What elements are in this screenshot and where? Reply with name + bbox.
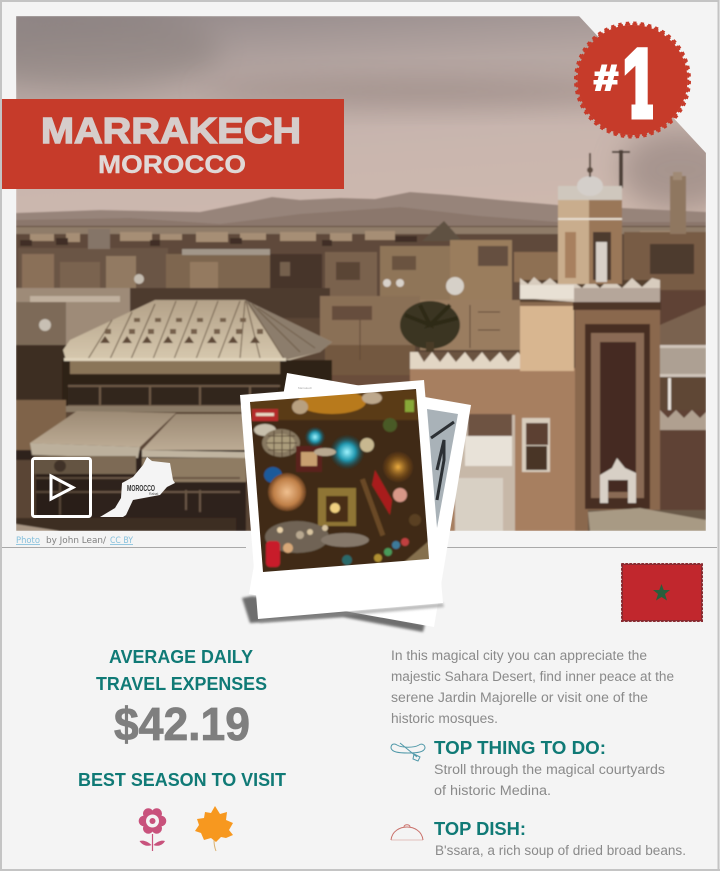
lantern market photo [250, 389, 429, 572]
polaroid stack [240, 373, 471, 632]
description paragraph: historic mosques. [391, 711, 498, 726]
rank number foot trim [612, 102, 663, 122]
map of Morocco [100, 457, 175, 517]
map label: MOROCCO [127, 484, 155, 493]
expense amount: $42.19 [114, 698, 250, 750]
top thing text [434, 762, 665, 798]
icon: spring flower [139, 808, 166, 851]
photo credit [16, 536, 134, 546]
polaroid shadow [242, 596, 425, 632]
hero photo of Marrakech skyline [0, 10, 720, 531]
city name: MARRAKECH [41, 110, 301, 151]
photo credit: by John Lean/ [46, 536, 106, 546]
description paragraph: serene Jardin Majorelle or visit one of the [391, 690, 648, 705]
top dish text: B'ssara, a rich soup of dried broad beans. [435, 843, 686, 858]
tent [62, 360, 332, 410]
expenses heading [96, 647, 267, 694]
rank number: 1 [622, 29, 658, 138]
title banner [2, 99, 344, 189]
top thing text: Stroll through the magical courtyards [434, 762, 665, 777]
video play button [32, 458, 90, 516]
front polaroid [240, 380, 444, 623]
map sublabel: Rabat [149, 492, 158, 496]
section divider line [2, 546, 717, 548]
back polaroid [249, 373, 471, 627]
description paragraph: In this magical city you can appreciate the [391, 648, 647, 663]
top dish heading: TOP DISH: [434, 818, 526, 839]
rank hash: # [594, 59, 618, 98]
description paragraph: majestic Sahara Desert, find inner peace at the [391, 669, 674, 684]
top thing heading: TOP THING TO DO: [434, 737, 606, 758]
back polaroid: Marrakech [298, 386, 313, 390]
panel: top dish [434, 818, 686, 858]
lower market [16, 399, 67, 451]
icon: canoe [391, 743, 425, 761]
panel: top thing to do [434, 737, 665, 798]
icon: dish cloche [391, 825, 423, 840]
expenses heading: TRAVEL EXPENSES [96, 674, 267, 694]
photo credit: Photo [16, 536, 40, 546]
right walls and tower [660, 290, 706, 293]
flag of Morocco [622, 564, 702, 621]
panel: best season [78, 769, 287, 851]
icon: autumn leaf [195, 806, 233, 851]
photo credit: CC BY [110, 536, 134, 546]
description paragraph [391, 648, 674, 726]
season heading: BEST SEASON TO VISIT [78, 769, 287, 790]
minaret [588, 199, 623, 285]
rank badge [575, 22, 690, 138]
top thing text: of historic Medina. [434, 783, 551, 798]
panel: travel expenses [96, 647, 267, 750]
country name: MOROCCO [98, 151, 246, 179]
expenses heading: AVERAGE DAILY [109, 647, 253, 667]
